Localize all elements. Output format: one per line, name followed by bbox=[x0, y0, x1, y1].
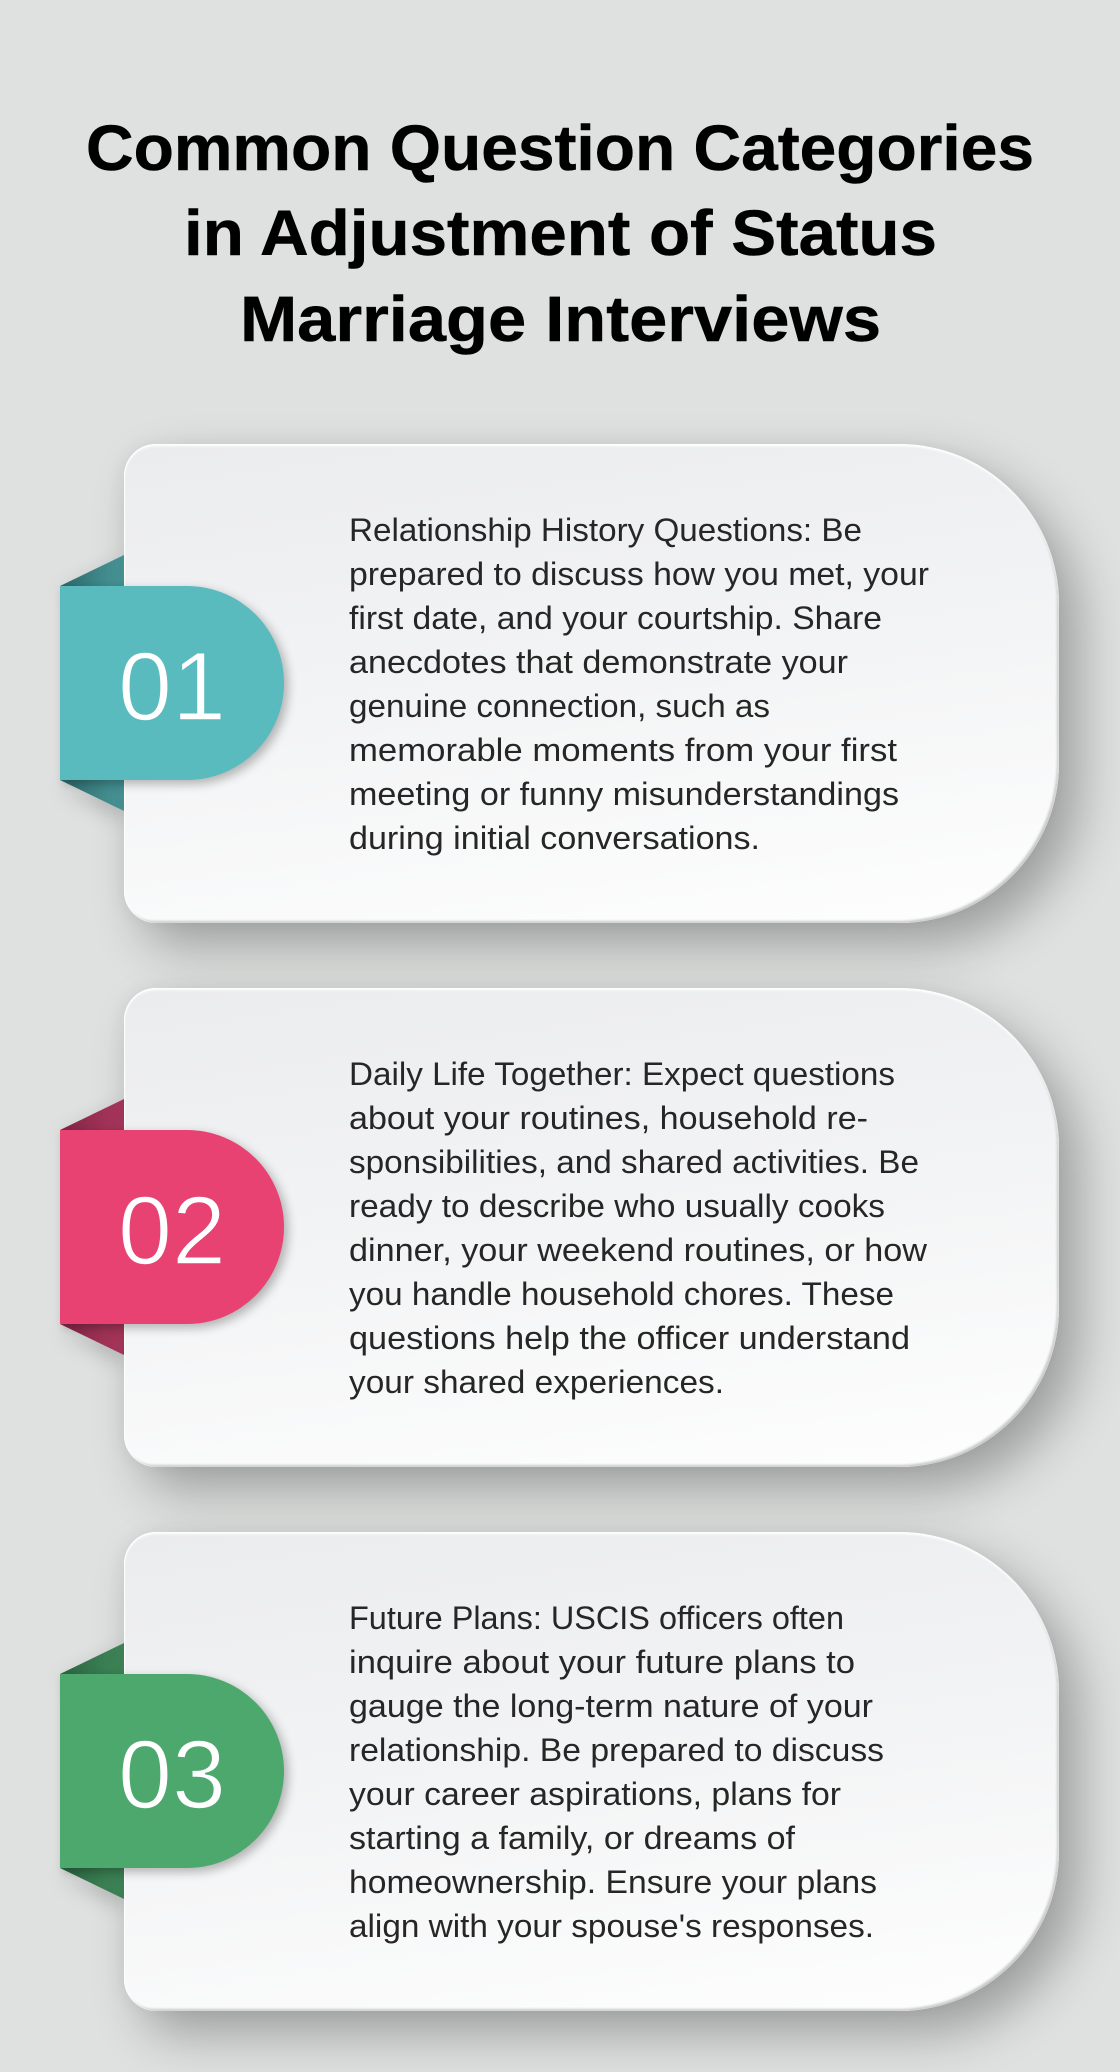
number badge 03: 03 bbox=[118, 1720, 226, 1829]
text block: relationship history questions: memorable moments from your first bbox=[349, 732, 897, 768]
title bbox=[86, 112, 1034, 355]
card background bbox=[124, 444, 1059, 923]
number badge 02: 02 bbox=[118, 1176, 226, 1285]
panel: step 02 daily life together bbox=[58, 980, 1106, 1516]
text block: relationship history questions bbox=[349, 512, 929, 856]
text block: relationship history questions: Relationship History Questions: Be bbox=[349, 512, 862, 548]
text block: daily life together: questions help the officer understand bbox=[349, 1320, 910, 1356]
text block: relationship history questions: prepared to discuss how you met, your bbox=[349, 556, 929, 592]
text block: daily life together: dinner, your weekend routines, or how bbox=[349, 1232, 928, 1268]
text block: daily life together: sponsibilities, and shared activities. Be bbox=[349, 1144, 919, 1180]
title: Marriage Interviews bbox=[240, 283, 881, 355]
icon: green ribbon folds bbox=[60, 1643, 124, 1909]
title: Common Question Categories bbox=[86, 112, 1034, 184]
text block: daily life together: you handle household chores. These bbox=[349, 1276, 894, 1312]
text block: future plans: starting a family, or dreams of bbox=[349, 1820, 796, 1856]
text block: future plans: gauge the long-term nature of your bbox=[349, 1688, 873, 1724]
text block: future plans bbox=[349, 1600, 884, 1944]
text block: relationship history questions: during initial conversations. bbox=[349, 820, 760, 856]
text block: future plans: relationship. Be prepared to discuss bbox=[349, 1732, 884, 1768]
number badge 03 bbox=[60, 1674, 284, 1868]
text block: daily life together: your shared experiences. bbox=[349, 1364, 724, 1400]
card background bbox=[124, 988, 1059, 1467]
text block: relationship history questions: first date, and your courtship. Share bbox=[349, 600, 882, 636]
text block: daily life together: ready to describe who usually cooks bbox=[349, 1188, 885, 1224]
text block: future plans: your career aspirations, plans for bbox=[349, 1776, 841, 1812]
number badge 01: 01 bbox=[118, 632, 226, 741]
text block: future plans: Future Plans: USCIS officers often bbox=[349, 1600, 844, 1636]
text block: daily life together: about your routines, household re- bbox=[349, 1100, 868, 1136]
panel: step 03 future plans bbox=[58, 1524, 1106, 2060]
text block: relationship history questions: anecdotes that demonstrate your bbox=[349, 644, 848, 680]
panel: step 01 relationship history bbox=[58, 436, 1106, 972]
text block: daily life together: Daily Life Together: Expect questions bbox=[349, 1056, 895, 1092]
text block: relationship history questions: meeting or funny misunderstandings bbox=[349, 776, 899, 812]
text block: future plans: inquire about your future plans to bbox=[349, 1644, 855, 1680]
card background bbox=[124, 1532, 1059, 2011]
text block: future plans: align with your spouse's responses. bbox=[349, 1908, 874, 1944]
icon: pink ribbon folds bbox=[60, 1099, 124, 1365]
text block: daily life together bbox=[349, 1056, 928, 1400]
icon: teal ribbon folds bbox=[60, 555, 124, 821]
text block: relationship history questions: genuine connection, such as bbox=[349, 688, 770, 724]
title: in Adjustment of Status bbox=[184, 197, 937, 269]
number badge 01 bbox=[60, 586, 284, 780]
text block: future plans: homeownership. Ensure your plans bbox=[349, 1864, 877, 1900]
number badge 02 bbox=[60, 1130, 284, 1324]
